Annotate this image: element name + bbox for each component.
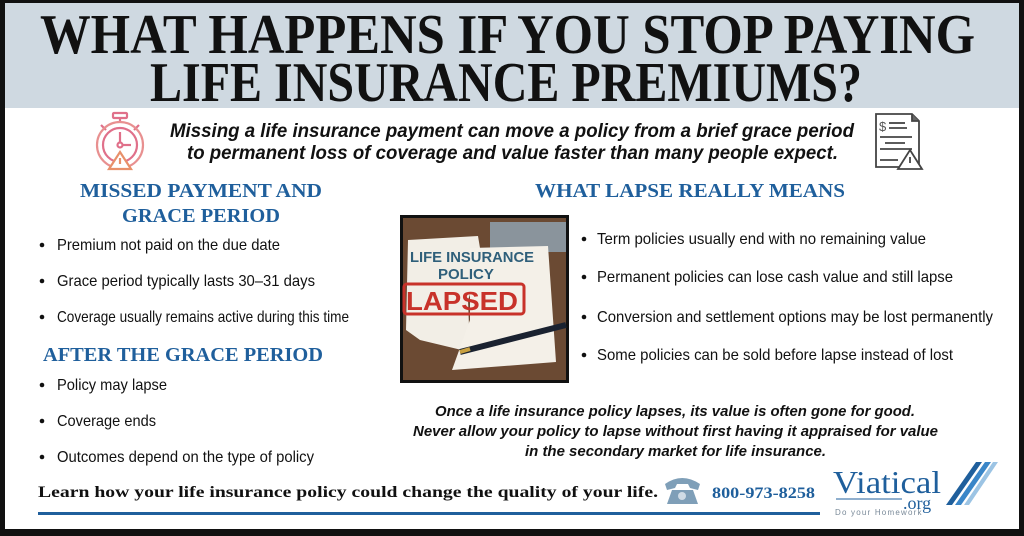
icon: document with warning [876, 114, 922, 169]
title: LIFE INSURANCE PREMIUMS? [150, 52, 862, 114]
icon: stopwatch [97, 113, 143, 169]
subtitle: Missing a life insurance payment can move a policy from a brief grace period [170, 121, 854, 142]
icon: document with warning: $ [879, 119, 887, 134]
heading: after the grace period: AFTER THE GRACE PERIOD [43, 344, 323, 366]
logo: viatical.org: .org [903, 493, 931, 513]
bullets: after grace period [40, 377, 314, 466]
icon: telephone [665, 478, 700, 504]
bullets: missed payment: Grace period typically lasts 30–31 days [57, 273, 315, 290]
image: lapsed policy [400, 215, 569, 383]
footer call to action: Learn how your life insurance policy could change the quality of your life. [38, 484, 658, 501]
logo: viatical.org: Viatical [833, 464, 941, 500]
image: lapsed policy: POLICY [438, 266, 494, 283]
callout note: in the secondary market for life insurance. [525, 443, 826, 460]
bullets: lapse meanings: Permanent policies can lose cash value and still lapse [597, 269, 953, 286]
heading: what lapse really means: WHAT LAPSE REALLY MEANS [535, 180, 845, 202]
callout note [413, 403, 938, 460]
callout note: Once a life insurance policy lapses, its value is often gone for good. [435, 403, 915, 420]
bullets: lapse meanings: Some policies can be sold before lapse instead of lost [597, 347, 954, 364]
bullets: missed payment: Premium not paid on the due date [57, 237, 280, 254]
subtitle: to permanent loss of coverage and value faster than many people expect. [187, 143, 838, 164]
subtitle [170, 121, 854, 164]
image: lapsed policy: LAPSED [406, 286, 518, 316]
bullets: lapse meanings: Conversion and settlement options may be lost permanently [597, 309, 993, 326]
heading: missed payment and grace period [80, 180, 322, 227]
header band [5, 3, 1019, 114]
bullets: after grace period: Policy may lapse [57, 377, 167, 394]
title [40, 4, 975, 114]
logo: viatical.org: Do your Homework [835, 508, 923, 517]
image: lapsed policy: LIFE INSURANCE [410, 249, 534, 266]
bullets: missed payment: Coverage usually remains active during this time [57, 309, 349, 326]
logo: viatical.org [833, 462, 998, 517]
bullets: lapse meanings [582, 231, 993, 364]
phone number: 800-973-8258 [712, 485, 815, 502]
bullets: lapse meanings: Term policies usually end with no remaining value [597, 231, 926, 248]
bullets: after grace period: Outcomes depend on the type of policy [57, 449, 314, 466]
bullets: missed payment [40, 237, 349, 326]
bullets: after grace period: Coverage ends [57, 413, 156, 430]
heading: missed payment and grace period: MISSED PAYMENT AND [80, 180, 322, 202]
callout note: Never allow your policy to lapse without first having it appraised for value [413, 423, 938, 440]
heading: missed payment and grace period: GRACE PERIOD [122, 205, 280, 227]
